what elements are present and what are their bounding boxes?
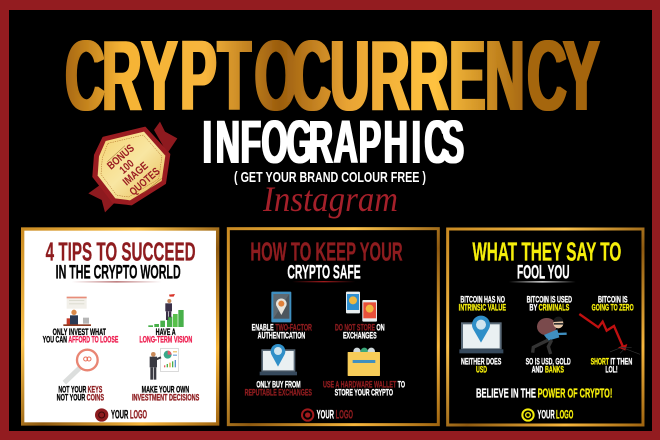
text: not your keys xyxy=(57,385,104,403)
badge: bonus 100 image quotes: BONUS xyxy=(105,142,137,172)
text: not your keys: NOT YOUR xyxy=(58,385,86,395)
text: reputable exchanges xyxy=(245,380,312,398)
text: no intrinsic value xyxy=(459,294,506,312)
text: hardware wallet: USE A HARDWARE WALLET xyxy=(323,380,396,390)
text: reputable exchanges: REPUTABLE EXCHANGES xyxy=(245,388,312,398)
platform label: Instagram: Instagram xyxy=(262,179,398,219)
text: short it: IT THEN xyxy=(610,356,632,366)
text: no intrinsic value: BITCOIN HAS NO xyxy=(460,294,505,304)
text: used by criminals: BY xyxy=(529,302,538,312)
text: long-term vision xyxy=(139,327,192,345)
text: do not store: EXCHANGES xyxy=(343,331,377,341)
panel: 4 tips to succeed: LOGO xyxy=(130,409,147,422)
text: only invest: ONLY INVEST WHAT xyxy=(53,327,106,337)
logo: YOUR xyxy=(537,409,555,422)
badge: bonus 100 image quotes: 100 xyxy=(117,158,137,177)
badge: bonus 100 image quotes: QUOTES xyxy=(127,166,162,198)
subheading: in the crypto world: IN THE CRYPTO WORLD xyxy=(56,262,181,283)
heading: how to keep your: HOW TO KEEP YOUR xyxy=(250,237,403,267)
text: only invest: AFFORD TO LOOSE xyxy=(68,335,118,345)
icon: tablet with pin xyxy=(271,292,291,322)
logo xyxy=(302,409,353,422)
icon: thief with bag xyxy=(533,317,567,354)
text: neither does usd xyxy=(461,356,501,374)
logo: YOUR xyxy=(317,409,334,422)
callout: believe in crypto: BELIEVE IN THE xyxy=(476,385,536,400)
icon: two phones xyxy=(346,292,377,322)
text: used by criminals: BITCOIN IS USED xyxy=(527,294,572,304)
panel: 4 tips to succeed xyxy=(21,227,219,426)
badge: bonus 100 image quotes xyxy=(88,122,177,212)
text: used by criminals xyxy=(527,294,572,312)
text: only invest: YOU CAN xyxy=(43,335,67,345)
icon: key in magnifier xyxy=(64,350,98,383)
text: two-factor: TWO-FACTOR xyxy=(275,323,312,333)
text: do not store: DO NOT STORE xyxy=(335,323,375,333)
text: so is usd: SO IS USD, GOLD xyxy=(526,356,571,366)
subtitle: ( GET YOUR BRAND COLOUR FREE ) xyxy=(234,169,426,186)
text: short it xyxy=(591,356,632,374)
text: not your keys: KEYS xyxy=(88,385,102,395)
logo: YOUR xyxy=(111,409,129,422)
text: hardware wallet: STORE YOUR CRYPTO xyxy=(335,388,393,398)
text: not your keys: COINS xyxy=(87,393,104,403)
text: used by criminals: CRIMINALS xyxy=(539,302,569,312)
icon: wallet with coins xyxy=(348,348,380,376)
icon: presenter with board xyxy=(150,348,178,380)
logo: LOGO xyxy=(556,409,573,422)
text: neither does usd: NEITHER DOES xyxy=(461,356,501,366)
text: not your keys: NOT YOUR xyxy=(57,393,85,403)
icon: person at desk xyxy=(63,297,91,326)
logo xyxy=(95,408,147,422)
text: make your own: MAKE YOUR OWN xyxy=(142,385,189,395)
text: two-factor: ENABLE xyxy=(252,323,274,333)
text: hardware wallet: TO xyxy=(398,380,405,390)
text: long-term vision: HAVE A xyxy=(156,327,176,337)
panel: what they say to fool you xyxy=(448,229,643,425)
text: do not store: ON xyxy=(376,323,385,333)
text: short it: LOL! xyxy=(605,364,618,374)
text: long-term vision: LONG-TERM VISION xyxy=(139,335,192,345)
text: so is usd xyxy=(526,356,571,374)
title: cryptocurrency: CRYPTOCURRENCY xyxy=(65,21,600,132)
text: so is usd: BANKS xyxy=(545,364,564,374)
text: make your own xyxy=(132,385,199,403)
text: do not store xyxy=(335,323,385,341)
text: only invest xyxy=(43,327,118,345)
panel: how to keep your crypto safe xyxy=(228,229,438,425)
badge: bonus 100 image quotes: IMAGE xyxy=(121,160,151,188)
text: short it: SHORT xyxy=(591,356,609,366)
text: neither does usd: USD xyxy=(476,364,487,374)
text: going to zero: BITCOIN IS xyxy=(598,294,628,304)
heading: 4 tips: 4 TIPS TO SUCCEED xyxy=(46,237,196,267)
logo xyxy=(522,409,573,422)
subheading: crypto safe: CRYPTO SAFE xyxy=(287,262,361,283)
icon: laptop with pin xyxy=(459,316,503,353)
icon: crashing red arrow xyxy=(579,314,640,354)
icon: laptop with pin xyxy=(260,344,297,375)
subheading: fool you: FOOL YOU xyxy=(517,262,570,283)
text: going to zero xyxy=(592,294,634,312)
logo: LOGO xyxy=(336,409,353,422)
text: no intrinsic value: INTRINSIC VALUE xyxy=(459,302,506,312)
text: make your own: INVESTMENT DECISIONS xyxy=(132,393,199,403)
text: so is usd: AND xyxy=(532,364,543,374)
heading: infographics: INFOGRAPHICS xyxy=(203,108,464,177)
text: two-factor: AUTHENTICATION xyxy=(258,331,305,341)
text: two-factor xyxy=(252,323,312,341)
icon: businessman on growth chart xyxy=(148,294,184,327)
text: hardware wallet xyxy=(323,380,405,398)
text: reputable exchanges: ONLY BUY FROM xyxy=(256,380,301,390)
